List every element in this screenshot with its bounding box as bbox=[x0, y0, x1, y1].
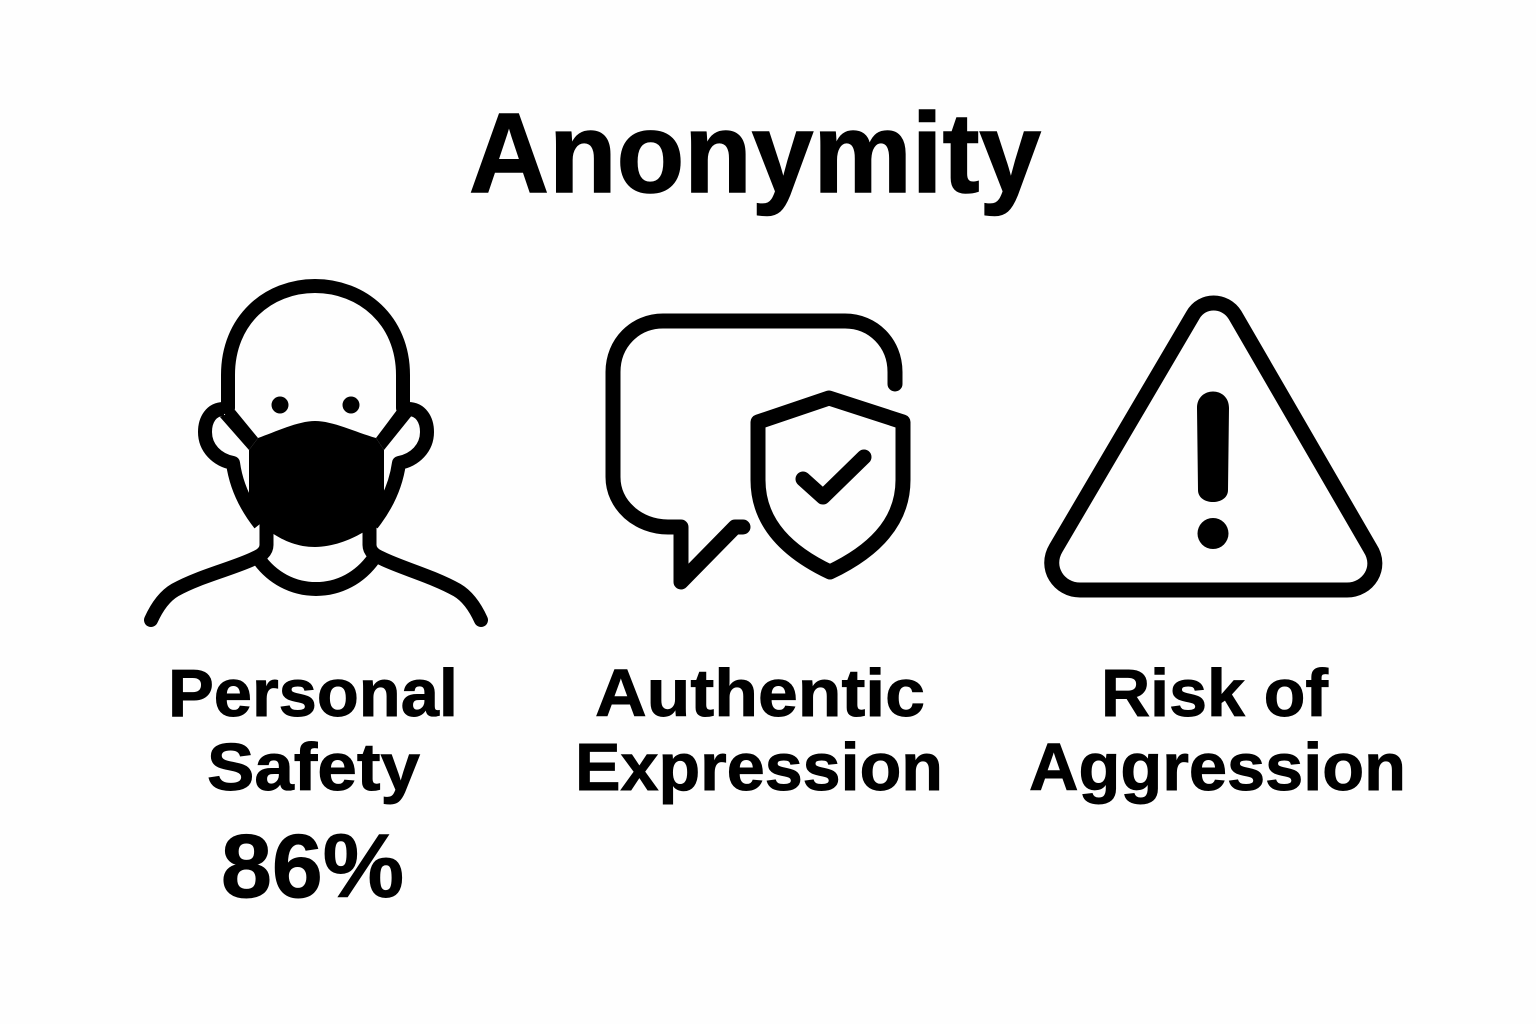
label: authentic expression bbox=[575, 656, 943, 805]
panel: risk of aggression bbox=[1029, 303, 1406, 805]
title: Anonymity bbox=[469, 90, 1041, 216]
label: authentic expression: Authentic bbox=[595, 656, 925, 731]
label: risk of aggression: Risk of bbox=[1101, 656, 1329, 731]
label: risk of aggression: Aggression bbox=[1029, 730, 1406, 805]
panel: personal safety bbox=[151, 286, 481, 917]
icon: warning triangle bbox=[1052, 303, 1375, 590]
label: personal safety bbox=[168, 656, 458, 805]
label: personal safety: Safety bbox=[207, 730, 420, 805]
icon: masked person bbox=[151, 286, 481, 620]
label: risk of aggression bbox=[1029, 656, 1406, 805]
icon: speech bubble with shield bbox=[613, 321, 903, 582]
label: personal safety: Personal bbox=[168, 656, 458, 731]
panel: authentic expression bbox=[575, 321, 943, 805]
label: authentic expression: Expression bbox=[575, 730, 943, 805]
statistic: 86%: 86% bbox=[221, 817, 404, 917]
